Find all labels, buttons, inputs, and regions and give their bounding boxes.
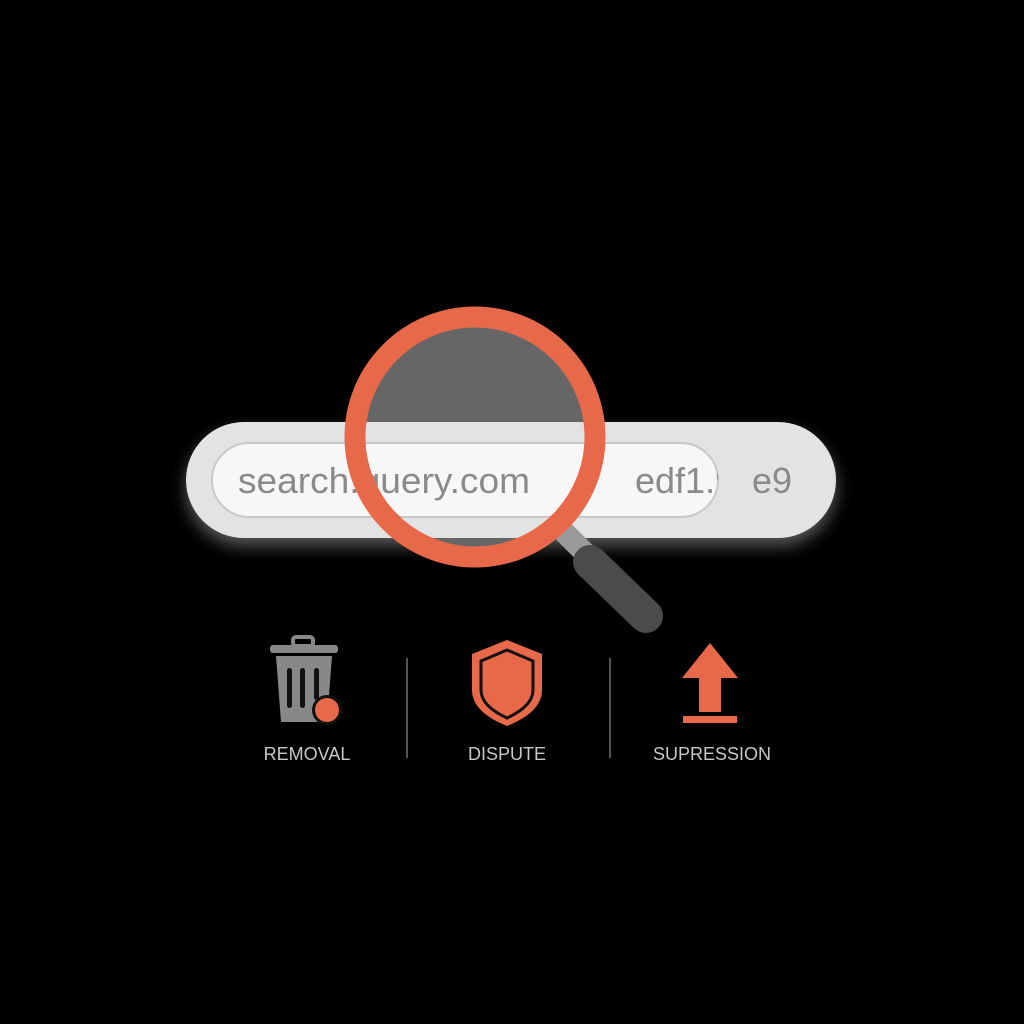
label: supression: SUPRESSION <box>653 744 771 764</box>
icon: trash <box>270 637 342 725</box>
icon: upload arrow <box>682 643 738 723</box>
url field: search.query.com <box>238 460 530 501</box>
label: removal: REMOVAL <box>264 744 350 764</box>
hash text: e9 <box>752 460 792 501</box>
hash text: edf1.9 <box>635 460 735 501</box>
divider <box>406 658 408 758</box>
search bar <box>186 422 836 546</box>
label: dispute: DISPUTE <box>468 744 546 764</box>
icon: shield <box>472 640 542 726</box>
divider <box>609 658 611 758</box>
hash text <box>636 467 790 494</box>
magnifying glass <box>340 300 646 616</box>
handle <box>560 528 646 616</box>
url field <box>212 443 718 517</box>
